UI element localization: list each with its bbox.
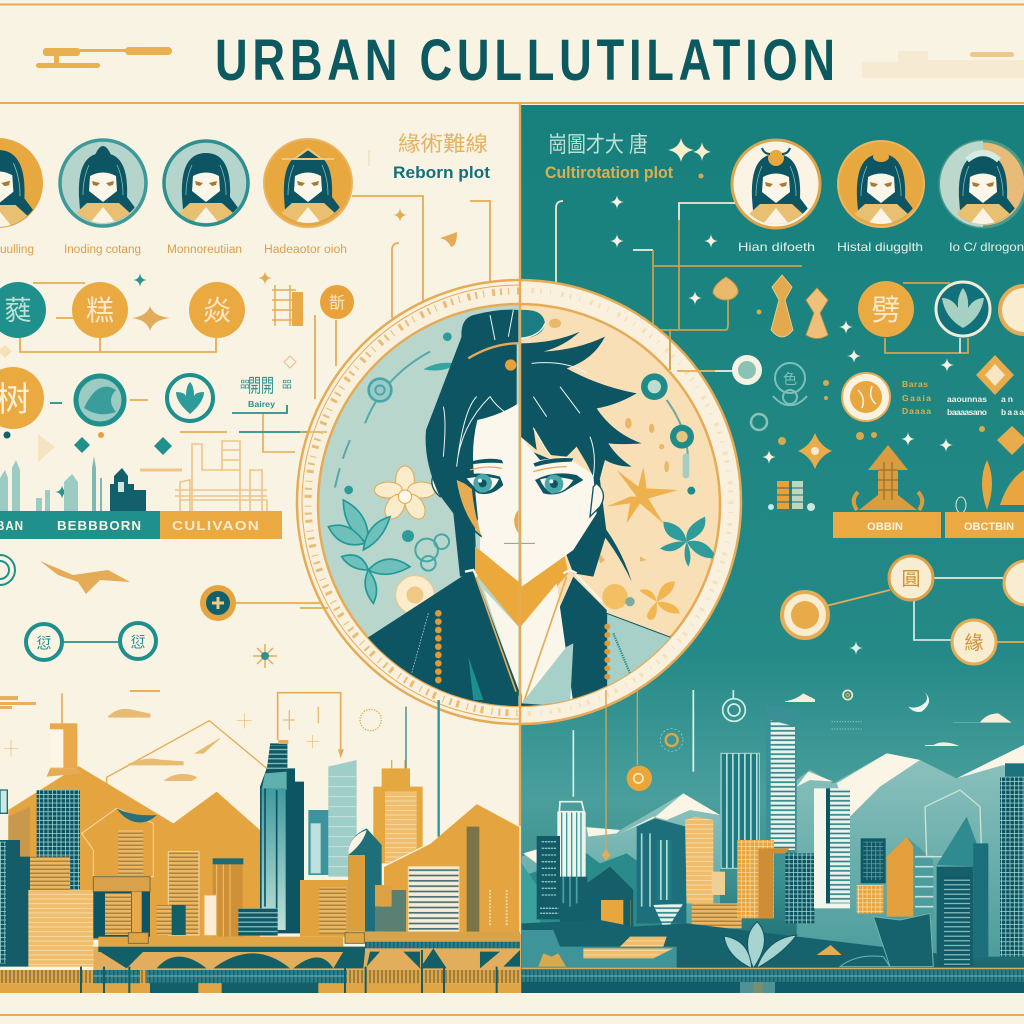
- emblem: orange fruit: [842, 373, 890, 421]
- illustration: figure and florals: [328, 310, 717, 713]
- bridge base: [0, 983, 520, 993]
- portrait 3: [164, 141, 248, 225]
- portrait labels: cultivation: Histal diugglth: [837, 240, 923, 254]
- icon: small orange dots: [698, 174, 985, 445]
- ornaments in sky: [278, 693, 381, 758]
- orange windows: [168, 852, 199, 935]
- icon: diamond: [132, 306, 170, 331]
- line drop coin: [627, 690, 652, 791]
- orange building right: [373, 768, 423, 863]
- portrait labels: cultivation: [738, 240, 1024, 254]
- icon: shell: [713, 277, 738, 300]
- emblem: orange seal: [72, 282, 128, 338]
- bridge deck: [98, 937, 343, 947]
- tan wing: [8, 807, 30, 857]
- left pale sliver: [0, 790, 7, 813]
- portrait 5: [732, 140, 820, 228]
- text block: white note: baaa: [1001, 407, 1024, 417]
- icon row 4: cultivation seals: [782, 556, 1024, 664]
- dome tower: [348, 828, 382, 932]
- flower: orange star: [607, 467, 678, 523]
- bridge arches: [100, 952, 365, 968]
- leaves: teal left: [328, 500, 410, 603]
- emblem: orange seal: 糕: [86, 295, 114, 326]
- medallion: outer ring: [297, 280, 741, 724]
- text block: orange note: Daaaa: [902, 406, 931, 416]
- text block: white note: an: [1001, 394, 1013, 404]
- emblem: seal two: [782, 592, 828, 638]
- portrait 1: [0, 138, 43, 228]
- eyes: [464, 474, 504, 494]
- emblem: teal seal: [0, 282, 46, 338]
- mountains: [522, 745, 1024, 957]
- coins right: [641, 373, 695, 495]
- flowers: orange lower: [602, 582, 680, 620]
- side lock left orange: [457, 480, 482, 537]
- neck: [475, 547, 568, 628]
- leaf accent: [424, 362, 452, 370]
- eyebrows: [467, 458, 573, 467]
- portrait labels: reborn: Monnoreutiian: [167, 244, 242, 256]
- short orange block: [300, 880, 348, 937]
- text block: orange note: Gaaia: [902, 393, 931, 403]
- decoration: title cloud right: [862, 51, 1024, 78]
- light orange block: [28, 890, 93, 967]
- icon: ornate diamond: [976, 355, 1014, 395]
- emblem: leaf ring: [936, 282, 990, 336]
- text block: white note: baaaasano: [947, 407, 987, 417]
- robe dark right: [520, 577, 607, 713]
- dark foreground: [522, 920, 937, 968]
- emblem: orange character: [0, 367, 44, 429]
- pale tower: [328, 760, 357, 877]
- white pole: [691, 690, 696, 772]
- mountain outline: [107, 721, 267, 857]
- tower: right tall pale: [766, 704, 797, 850]
- flower: cream: [374, 466, 436, 523]
- icon: hourglass small: [806, 288, 828, 338]
- icon: orange bird: [40, 561, 130, 594]
- portrait labels: cultivation: Hian difoeth: [738, 240, 815, 254]
- right massif: [383, 803, 520, 933]
- decoration: title cloud left: [36, 47, 172, 68]
- text block: teal note: 㗊: [282, 379, 292, 391]
- icon: small orange block: [292, 292, 303, 326]
- banner: urban reborn cultivation: BEBBBORN: [57, 518, 142, 533]
- centre divider line: [519, 280, 521, 725]
- footer line: [0, 1014, 1024, 1016]
- title: URBAN CULLUTILATION: [215, 29, 835, 93]
- roof: small orange: [817, 945, 842, 955]
- emblem: leaf ring: [167, 375, 213, 421]
- teal grid tower: [37, 790, 80, 890]
- tower: dark left: [537, 836, 560, 919]
- bun and crown: [461, 310, 518, 344]
- mountain accents: [4, 709, 319, 825]
- hair right spikes: [521, 332, 642, 487]
- tower: orange angled: [887, 837, 933, 920]
- emblem: teal seal: 蕤: [4, 296, 32, 326]
- tower: edge grid: [1000, 763, 1024, 957]
- flower: lower cream: [396, 576, 434, 614]
- emblem: seal one: 圓: [901, 569, 921, 590]
- tower: vertical stripes: [721, 753, 759, 868]
- chart: small table: [768, 481, 815, 511]
- panel heading: cultivation plot: [545, 132, 673, 182]
- emblem: right edge seal: [1000, 286, 1024, 334]
- panel: cultivation teal half: [521, 105, 1024, 993]
- sparkles left: [55, 273, 147, 499]
- illustration: mini skyline orange: [140, 441, 267, 512]
- icon: eye ring: [660, 729, 683, 751]
- confetti right: [549, 318, 669, 564]
- plant: lush right: [840, 913, 933, 967]
- beads: [435, 610, 610, 683]
- emblem: teal ring right: [120, 623, 156, 659]
- icon: small pins: [4, 432, 104, 438]
- orange sparkles left: [0, 150, 457, 368]
- icon: small ring: [843, 690, 852, 700]
- mouth: [504, 542, 535, 544]
- under-bridge fill: [93, 947, 520, 971]
- collars: [483, 583, 573, 703]
- rose cluster: [415, 534, 449, 571]
- banner: urban cultivation right: OBBIN: [867, 521, 903, 533]
- emblem: teal ring left: 愆: [36, 635, 52, 652]
- portrait 6: [838, 141, 924, 227]
- connector overlays on ring: [300, 330, 715, 608]
- text block: teal note: [240, 376, 292, 409]
- connectors: left side: [20, 196, 490, 603]
- emblem: teal crest: [773, 363, 807, 405]
- railing: [522, 968, 1024, 969]
- skyline: left city: [0, 693, 520, 993]
- portrait row: reborn characters: [0, 138, 352, 228]
- icon: ladder: [272, 285, 296, 326]
- panel heading: reborn plot: [393, 133, 490, 182]
- icon: faint triangle: [38, 434, 55, 462]
- illustration: pagoda: [854, 445, 922, 510]
- banner: urban reborn cultivation: CULIVAON: [172, 518, 260, 533]
- icon row 4: reborn lower: [0, 555, 277, 709]
- portrait 4: [264, 139, 352, 227]
- sparkles: large header pair: [668, 138, 711, 162]
- tower: white columns: [557, 802, 587, 922]
- tower: far right: [937, 843, 988, 967]
- low orange block: [601, 900, 631, 943]
- banner: urban cultivation right: [833, 512, 1024, 538]
- clouds: [785, 693, 1012, 746]
- emblem: seal right edge: [1004, 561, 1024, 605]
- emblem: dark seal: [200, 585, 236, 621]
- emblem: teal ring: [76, 376, 124, 424]
- text block: orange note: [902, 379, 931, 416]
- teal drop lines: [403, 707, 408, 768]
- plant: small shrub: [538, 953, 566, 967]
- ear right: [590, 483, 603, 517]
- emblem: pale circle: [732, 355, 762, 385]
- note text dots: [832, 722, 862, 729]
- emblem: seal three: [952, 620, 996, 664]
- tower: orange grid: [737, 840, 789, 918]
- icon: clouds left: [0, 690, 160, 709]
- emblem: small orange seal: 斮: [329, 294, 345, 312]
- orange reflections: [583, 937, 673, 958]
- illustration: orange leaf: [956, 460, 1024, 513]
- icon: hanging rose: [723, 690, 745, 721]
- main orange massif: [8, 766, 260, 940]
- emblem: orange seal: 劈: [871, 294, 901, 327]
- portrait labels: cultivation: Io C/ dlrogon: [949, 240, 1024, 254]
- blue tower: [260, 743, 304, 933]
- line drop orange: [602, 690, 611, 861]
- banner: urban cultivation right: OBCTBIN: [964, 521, 1014, 533]
- portrait labels: reborn: Hadeaotor oioh: [264, 244, 347, 256]
- text block: teal note: Bairey: [248, 400, 276, 409]
- ring text marks left: [302, 284, 519, 720]
- bridge railing: [0, 970, 520, 983]
- illustration: mini skyline teal: [0, 456, 146, 512]
- tower with spire: [47, 693, 81, 777]
- connectors: right side: [556, 201, 1024, 642]
- emblem: teal crest: 色: [783, 371, 797, 387]
- banner: urban reborn cultivation: [0, 511, 282, 539]
- robe dark left: [367, 573, 518, 713]
- text block: teal note: 㗊: [240, 379, 250, 391]
- icon row 3: reborn emblems: [0, 150, 457, 499]
- icon: crescent moon: [908, 690, 929, 712]
- portrait 7: [940, 141, 1024, 227]
- tower: white slab: [814, 788, 850, 908]
- portrait row: cultivation characters: [732, 140, 1024, 228]
- icon: orange diamond right: [997, 426, 1024, 455]
- orbit arcs: [333, 352, 688, 497]
- emblem: seal one: [889, 556, 933, 600]
- icon row 2: cultivation emblems: [713, 275, 1024, 338]
- icon: teal diamonds: [74, 437, 172, 455]
- portrait 2: [60, 140, 146, 226]
- palm fronds: [925, 790, 982, 857]
- text block: white note: aaounnas: [947, 394, 987, 404]
- teal inner panel: [468, 657, 483, 700]
- connectors: left teal: [50, 403, 327, 642]
- plant: central leaves: [724, 922, 797, 968]
- left dark tower: [0, 840, 30, 967]
- emblem: teal ring left: [26, 624, 62, 660]
- portrait labels: reborn: Inoding cotang: [64, 244, 141, 256]
- mid building: [82, 808, 153, 877]
- emblem: teal ring right: 愆: [130, 634, 146, 651]
- icon: ring partial: [0, 555, 15, 585]
- icon: ring small: [751, 414, 767, 430]
- emblem: orange seal: 焱: [203, 295, 231, 326]
- footer band: [0, 993, 1024, 1015]
- low orange pair: [857, 885, 883, 913]
- icon: teal rose: [369, 379, 391, 401]
- nose: [514, 510, 518, 533]
- face right: [521, 437, 597, 587]
- portrait labels: reborn: uulling: [0, 244, 34, 256]
- emblem: small orange seal: [320, 285, 354, 319]
- emblem: orange seal: [189, 282, 245, 338]
- panel heading: reborn plot: Reborn plot: [393, 163, 490, 182]
- icon: sun burst: [253, 644, 277, 668]
- icon: star diamond: [798, 433, 832, 469]
- icon: hourglass: [771, 275, 793, 337]
- text block: orange note: Baras: [902, 379, 928, 389]
- dots left: [344, 332, 452, 542]
- panel heading: cultivation plot: 崗圖才大 唐: [548, 132, 648, 157]
- emblem: seal three: 緣: [964, 632, 984, 654]
- medallion: inner portrait disc: [318, 304, 720, 706]
- tower: orange striped: [685, 817, 742, 928]
- text block: white note: [947, 394, 1024, 417]
- panel heading: cultivation plot: Cultirotation plot: [545, 163, 673, 182]
- robe pale right: [607, 613, 673, 693]
- leaves: teal right: [660, 517, 717, 567]
- hair highlights: [443, 310, 594, 477]
- icon: faint sparkle: [849, 641, 863, 655]
- text block: teal note: 開開: [248, 376, 274, 397]
- ring text marks right: [521, 288, 734, 716]
- tower: teal windows centre left: [637, 818, 686, 927]
- face left: [473, 403, 518, 582]
- sparkles right: [610, 195, 954, 464]
- skyline: right city: [522, 690, 1024, 994]
- portrait labels: reborn: [0, 244, 347, 256]
- right strand: [605, 530, 632, 582]
- tower: teal windows mid: [785, 853, 814, 923]
- line drop white: [571, 730, 576, 797]
- emblem: orange seal: [858, 281, 914, 337]
- hair behind: [426, 313, 517, 577]
- ear left: [431, 477, 441, 498]
- icon row 2: reborn emblems: [0, 282, 354, 338]
- panel heading: reborn plot: 緣術難線: [398, 133, 488, 156]
